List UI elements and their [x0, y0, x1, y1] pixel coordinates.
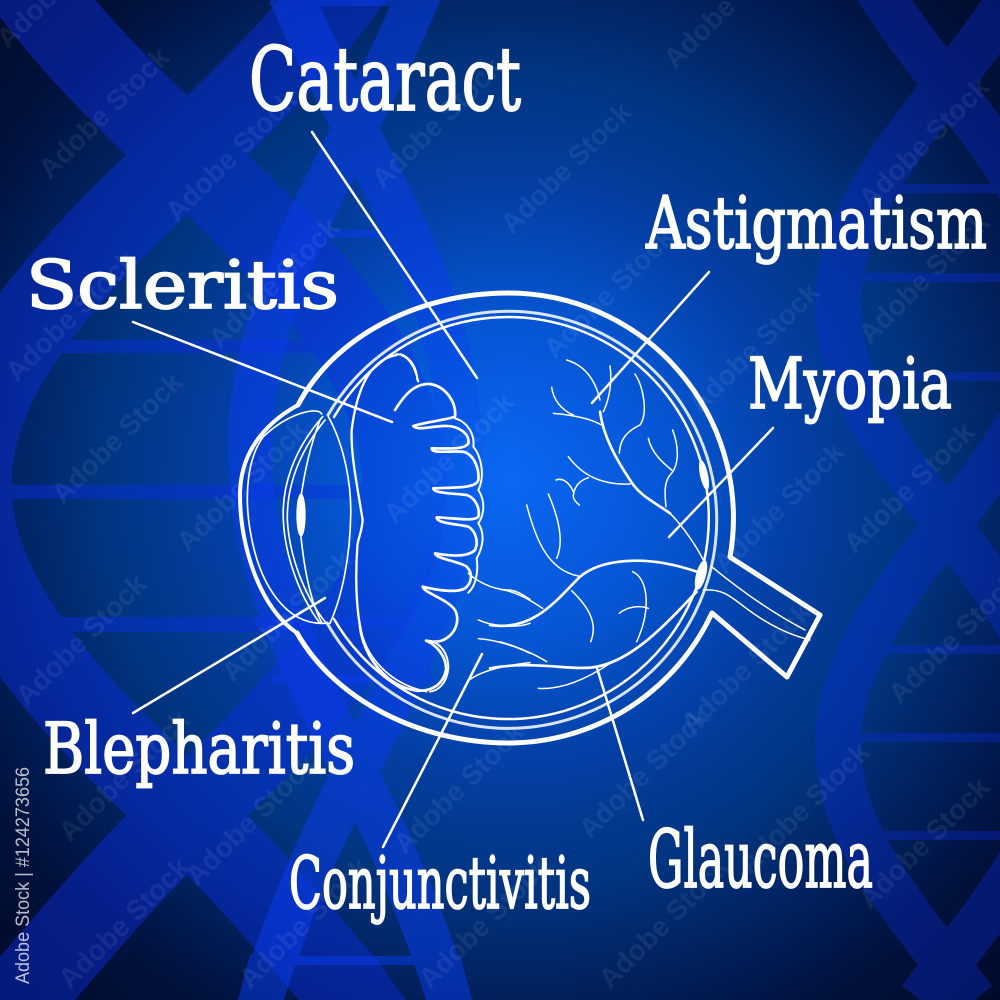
stock watermarks: Adobe Stock [707, 436, 851, 579]
stock watermarks: Adobe Stock [365, 51, 509, 194]
stock watermarks: Adobe Stock [732, 736, 876, 879]
label: Conjunctivitis: Conjunctivitis [289, 841, 591, 925]
stock watermarks: Adobe Stock [179, 748, 323, 891]
ciliary body top lobe [397, 354, 418, 382]
iris lines [301, 420, 322, 623]
ciliary outer contour [426, 418, 483, 692]
stock watermarks: Adobe Stock [52, 851, 196, 994]
retina ring [334, 317, 709, 719]
main lower vessels [490, 561, 697, 626]
background DNA helix: right [838, 0, 1000, 1000]
main upper vessel [600, 412, 670, 513]
pupil [296, 493, 306, 537]
stock watermarks: Adobe Stock [52, 704, 196, 847]
vessel branches [500, 360, 677, 688]
cornea outer [240, 405, 298, 633]
stock watermarks: Adobe Stock [0, 244, 143, 387]
stock watermarks: Adobe Stock [852, 771, 996, 914]
stock watermarks: Adobe Stock [592, 851, 736, 994]
stock watermarks: Adobe Stock [682, 276, 826, 419]
lens front surfaces [283, 417, 325, 623]
stock watermarks: Adobe Stock [9, 568, 153, 711]
label: Scleritis: Scleritis [26, 247, 339, 324]
left vessels [468, 573, 530, 679]
lens back surface [320, 417, 351, 623]
optic disc [692, 559, 710, 591]
stock watermarks: Adobe Stock [537, 221, 681, 364]
leader: Glaucoma [597, 668, 643, 820]
label: Blepharitis: Blepharitis [43, 708, 355, 790]
front wall lower edge [360, 623, 427, 692]
leader lines [133, 132, 773, 847]
label: Cataract: Cataract [249, 28, 521, 131]
leader: Conjunctivitis [383, 654, 482, 847]
stock watermarks: Adobe Stock [159, 84, 303, 227]
background DNA helix: centre [238, 0, 472, 1000]
front of eye, drawn in zoom coordinates [247, 354, 530, 692]
stock watermarks: Adobe Stock [852, 71, 996, 214]
stock watermarks: Adobe Stock [494, 96, 638, 239]
outer sclera and optic nerve sheath [297, 293, 820, 743]
leader: Scleritis [133, 322, 392, 422]
stock watermarks: Adobe Stock [572, 701, 716, 844]
leader: Myopia [669, 428, 773, 537]
stock watermarks: Adobe Stock [32, 41, 176, 184]
background DNA helix: left [0, 0, 406, 1000]
small retinal patch [697, 459, 711, 491]
stock watermarks: Adobe Stock [412, 851, 556, 994]
choroid ring [327, 311, 717, 728]
central blue glow [280, 250, 740, 710]
stock watermarks: Adobe Stock [852, 206, 996, 349]
stock watermarks: Adobe Stock [837, 416, 981, 559]
leader: Blepharitis [133, 598, 325, 713]
stock watermarks: Adobe Stock [202, 211, 346, 354]
eye anatomy diagram [240, 293, 820, 743]
stock image credit: Adobe Stock | #124273656 [13, 767, 34, 984]
stock watermarks: Adobe Stock [387, 716, 531, 859]
stock watermarks: Adobe Stock [45, 366, 189, 509]
stock watermarks: Adobe Stock [215, 544, 359, 687]
ciliary body folds [360, 384, 479, 691]
optic nerve fibres [703, 567, 810, 640]
stock watermarks: Adobe Stock [674, 596, 818, 739]
retina vessels, drawn in zoom coordinates [490, 360, 810, 688]
leader: Astigmatism [592, 272, 709, 403]
stock watermarks: Adobe Stock [232, 851, 376, 994]
stock watermarks: Adobe Stock [377, 386, 521, 529]
stock watermarks: Adobe Stock [170, 414, 314, 557]
cornea inner [247, 411, 323, 623]
vitreous front wall [352, 355, 397, 627]
leader: Cataract [312, 132, 477, 378]
